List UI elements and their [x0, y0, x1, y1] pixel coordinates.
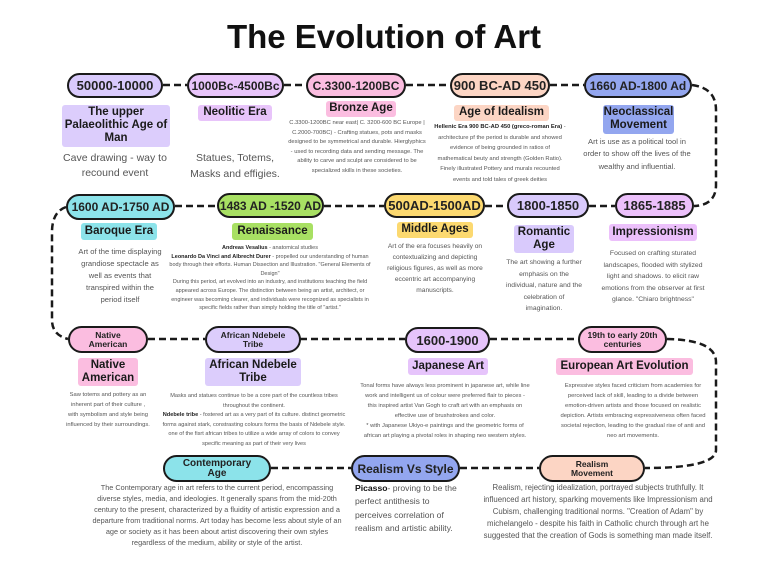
pill: 500AD-1500AD: 500AD-1500AD: [388, 198, 481, 213]
heading: baroque: [81, 223, 157, 240]
text: african ndebele: Masks and statues continue to be a core part of the countless tribes throughout the continent.: [170, 393, 338, 409]
pill: african ndebele: Tribe: [243, 338, 263, 348]
pill: 500AD-1500AD: [384, 193, 485, 218]
pill: realism movement: [539, 455, 645, 482]
heading: middle ages: [397, 222, 473, 238]
text: african ndebele: Ndebele tribe - fostered art as a very part of its culture. distinct geometric forms against stark, constrasting colours forms the basis of Ndebele style. one of the fisrt african tribes to utilize a wide array of colors to convey specific meaning as part of their very lives: [163, 412, 345, 447]
text: japanese art: Tonal forms have always less prominent in japanese art, while line work and intelligent us of colour were preferred flair to pieces - this inspired artist Van Gogh to craft art with an emphasis on effective use of brushstrokes and color.: [360, 383, 530, 419]
heading: upper palaeolithic: The upper Palaeolithic Age of Man: [65, 106, 167, 144]
text: romantic: The art showing a further emphasis on the individual, nature and the celebration of imagination.: [506, 259, 582, 312]
pill: african ndebele: African Ndebele: [221, 330, 285, 340]
heading: bronze age: [326, 101, 396, 117]
pill: 1865-1885: [615, 193, 694, 218]
text: neoclassical: Art is use as a political tool in order to show off the lives of the wealthy and influential.: [583, 137, 691, 171]
text: realism movement: Realism, rejecting idealization, portrayed subjects truthfully. It influenced art history, sparking movements like Impressionism and Cubism, challenging traditional norms. "Creation of Adam" by michelangelo - despite his faith in Catholic church through art he suggested that the creation of Gods is something man made itself.: [483, 483, 713, 540]
heading: japanese art: [408, 358, 488, 375]
heading: impressionism: Impressionism: [612, 226, 694, 238]
text: contemporary: The Contemporary age in art refers to the current period, encompassing diverse styles, media, and ideologies. It generally spans from the mid-20th century to the present, characterized by a fluidity of artistic expression and a departure from traditional norms. Art today has become less about style of an age or society as it has been about artist discovering their own styles regardless of the medium, ability or style of the artist.: [92, 483, 342, 547]
heading: african ndebele: African Ndebele Tribe: [209, 359, 297, 384]
text: renaissance: Leonardo Da Vinci and Albrecht Durer - propelled our understanding of human body through their efforts. Human Dissection and Illustration. "General Elements of Design": [169, 254, 371, 277]
heading: neolitic: [198, 105, 272, 121]
pill: 1483 AD -1520 AD: [217, 193, 324, 218]
heading: renaissance: [232, 223, 313, 240]
heading: japanese art: Japanese Art: [412, 360, 484, 372]
heading: bronze age: Bronze Age: [329, 102, 393, 114]
pill: african ndebele: [205, 326, 301, 353]
pill: 19th to early 20th: centuries: [604, 338, 641, 348]
pill: realism movement: Movement: [571, 468, 613, 478]
pill: 1865-1885: 1865-1885: [623, 198, 686, 213]
heading: romantic: Romantic Age: [518, 226, 570, 251]
pill: contemporary age: [163, 455, 271, 482]
pill: 50000-10000: 50000-10000: [77, 78, 153, 93]
pill: 900 BC-AD 450: 900 BC-AD 450: [454, 78, 546, 93]
pill: C.3300-1200BC: C.3300-1200BC: [313, 78, 399, 92]
pill: realism vs style: Realism Vs Style: [357, 462, 454, 476]
text: idealism: Hellenic Era 900 BC-AD 450 (greco-roman Era) - architecture pf the period is durable and showed evidence of being grounded in ratios of mathematical beuty and strength (Golden Ratio). Finely illustrated Pottery and murals recounted events and told tales of greek deities: [434, 124, 566, 183]
text: african ndebele: [162, 393, 346, 447]
heading: european art evolution: European Art Evolution: [560, 360, 688, 372]
pill: 1800-1850: 1800-1850: [517, 198, 579, 213]
pill: 900 BC-AD 450: [450, 73, 550, 98]
pill: 1600-1900: [405, 327, 490, 353]
heading: impressionism: [609, 224, 697, 241]
text: bronze: C.3300-1200BC near east| C. 3200-600 BC Europe | C.2000-700BC) - Crafting statues, pots and masks designed to be symmetrical and durable. Hierglyphics - used to recording data and sending message. The ability to carve and sculpt are considered to be specialized skills in these societies.: [288, 120, 426, 174]
pill: 50000-10000: [67, 73, 163, 98]
pill: 19th to early 20th: [578, 326, 667, 353]
heading: baroque: Baroque Era: [85, 225, 153, 237]
heading: renaissance: Renaissance: [237, 225, 308, 237]
text: realism vs style: Picasso- proving to be the perfect antithesis to perceives correlation of realism and artistic ability.: [355, 483, 457, 533]
pill: contemporary age: Contemporary: [183, 458, 251, 468]
pill: 1000Bc-4500Bc: 1000Bc-4500Bc: [191, 78, 280, 92]
text: renaissance: During this period, art evolved into an industry, and institutions teaching the field appeared across Europe. The distinction between being an artist, architect, or engineer was becoming clearer, and individuals were recognized as specialists in specific fields rather than simply holding the title of "artist.": [171, 279, 369, 311]
pill: 1600 AD-1750 AD: [66, 194, 175, 220]
pill: C.3300-1200BC: [306, 73, 406, 98]
pill: 1800-1850: [507, 193, 589, 218]
title: The Evolution of Art: [227, 18, 541, 55]
pill: realism vs style: [351, 455, 460, 482]
heading: neolitic: Neolitic Era: [203, 106, 267, 118]
text: impressionism: Focused on crafting sturated landscapes, flooded with stylized light and shadows. to elicit raw emotions from the observer at first glance. "Chiaro brightness": [601, 250, 705, 303]
text: japanese art: * with Japanese Ukiyo-e paintings and the geometric forms of african art playing a pivotal roles in shaping neo western styles.: [364, 423, 526, 439]
heading: middle ages: Middle Ages: [401, 223, 469, 235]
pill: realism movement: Realism: [576, 459, 608, 469]
pill: 1483 AD -1520 AD: 1483 AD -1520 AD: [220, 198, 321, 212]
pill: 1000Bc-4500Bc: [187, 73, 284, 98]
text: cave drawing: Cave drawing - way to recound event: [63, 152, 167, 179]
text: neolitic: Statues, Totems, Masks and effigies.: [190, 152, 280, 180]
pill: native american: American: [89, 338, 127, 348]
pill: 1600-1900: 1600-1900: [416, 332, 479, 348]
heading: european art evolution: [556, 358, 693, 375]
pill: contemporary age: Age: [208, 468, 226, 478]
text: japanese art: [360, 383, 530, 439]
heading: neoclassical: Neoclassical Movement: [604, 106, 673, 131]
pill: 1600 AD-1750 AD: 1600 AD-1750 AD: [72, 200, 169, 214]
text: european: Expressive styles faced criticism from academies for perceived lack of skill, leading to a divide between emotion-driven artists and those focused on realistic depiction. Artists embracing expressiveness often faced societal rejection, leading to the gradual rise of anti and neo art movements.: [560, 383, 706, 439]
pill: 19th to early 20th: 19th to early 20th: [588, 330, 657, 340]
pill: 1660 AD-1800 Ad: [584, 73, 692, 98]
text: baroque: Art of the time displaying grandiose spectacle as well as events that transpired within the period itself: [78, 247, 162, 304]
heading: age of idealism: [454, 105, 549, 121]
heading: native american: Native American: [82, 359, 134, 384]
text: middle ages: Art of the era focuses heavily on contextualizing and depicting religious figures, as well as more eccentric art accompanying manuscripts.: [387, 243, 483, 294]
text: renaissance: [169, 245, 371, 311]
pill: native american: [68, 326, 148, 353]
pill: native american: Native: [95, 330, 121, 340]
heading: age of idealism: Age of Idealism: [459, 106, 544, 118]
text: native american: Saw totems and pottery as an inherent part of their culture , with symbolism and style being influenced by their surroundings.: [66, 392, 150, 428]
text: renaissance: Andreas Vesalius - anatomical studies: [222, 245, 318, 251]
pill: 1660 AD-1800 Ad: 1660 AD-1800 Ad: [590, 78, 686, 92]
